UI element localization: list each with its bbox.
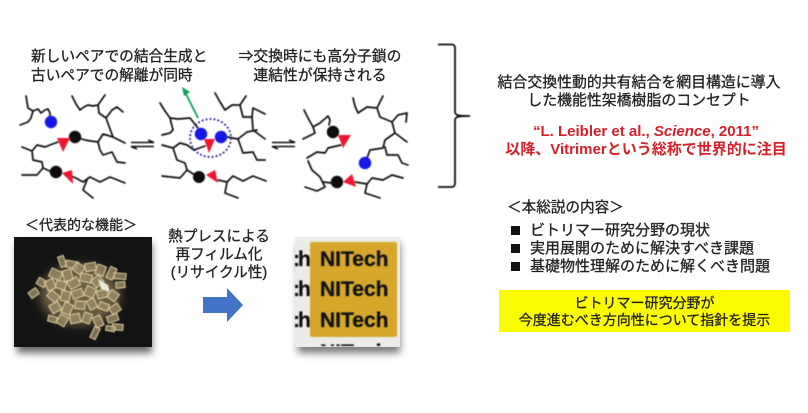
heading: connectivity maintained: 連結性が保持される [253, 68, 387, 84]
heading: representative function: ＜代表的な機能＞ [25, 217, 137, 233]
contents list [511, 222, 770, 275]
yellow callout: ビトリマー研究分野が [574, 295, 714, 311]
blue block arrow [203, 288, 243, 322]
red triangle 2 [62, 170, 73, 184]
film label text: NITech [320, 309, 388, 332]
red triangle 1 [57, 138, 70, 152]
heading: new and old pair exchange: 新しいペアでの結合生成と [31, 49, 207, 65]
blue bead 3 [359, 157, 371, 169]
yellow callout: 今度進むべき方向性について指針を提示 [519, 312, 770, 328]
contents list: 実用展開のために解決すべき課題 [530, 240, 754, 257]
heading: connectivity maintained [239, 48, 401, 84]
photo: flakes [14, 237, 152, 353]
heading: new and old pair exchange [31, 48, 207, 84]
film label text: NITech [320, 248, 388, 271]
contents list: ビトリマー研究分野の現状 [530, 222, 710, 239]
text: hot press recycling: 熱プレスによる [168, 229, 270, 245]
red citation [505, 123, 787, 158]
black bead 4 [327, 126, 339, 138]
text: hot press recycling: (リサイクル性) [171, 265, 267, 281]
red citation: 以降、Vitrimerという総称で世界的に注目 [505, 141, 787, 158]
concept description: した機能性架橋樹脂のコンセプト [527, 93, 751, 109]
white flake [98, 279, 110, 292]
film label text: NITech [320, 278, 388, 301]
red citation: “L. Leibler et al., Science, 2011” [533, 123, 759, 140]
text: hot press recycling [168, 228, 270, 281]
concept description: 結合交換性動的共有結合を網目構造に導入 [498, 75, 780, 91]
red triangle 4 [206, 170, 218, 183]
black bead 2 [50, 166, 62, 178]
equilibrium arrow 1 [131, 140, 154, 149]
polymer network chains [20, 93, 408, 198]
right brace [438, 44, 470, 187]
concept description [498, 74, 780, 109]
equilibrium arrow 2 [272, 140, 295, 149]
blue bead 1 [45, 116, 57, 128]
blue bead 2a [195, 128, 207, 140]
black bead 3 [193, 171, 205, 183]
red triangle 3 [204, 139, 215, 153]
photo: recycled film [295, 237, 400, 353]
black bead 5 [331, 176, 343, 188]
text: hot press recycling: 再フィルム化 [176, 247, 262, 263]
heading: new and old pair exchange: 古いペアでの解離が同時 [31, 68, 193, 84]
beads and triangles [45, 116, 371, 188]
heading: connectivity maintained: ⇒交換時にも高分子鎖の [239, 49, 401, 65]
red triangle 6 [343, 174, 356, 187]
black bead 1 [69, 131, 81, 143]
dotted exchange circle [190, 119, 231, 157]
contents list: 基礎物性理解のために解くべき問題 [530, 258, 770, 275]
yellow callout [499, 290, 790, 332]
contents heading: ＜本総説の内容＞ [507, 200, 624, 216]
green arrow [182, 87, 198, 118]
red triangle 5 [338, 135, 351, 148]
film label text [294, 248, 388, 347]
blue bead 2b [215, 131, 227, 143]
